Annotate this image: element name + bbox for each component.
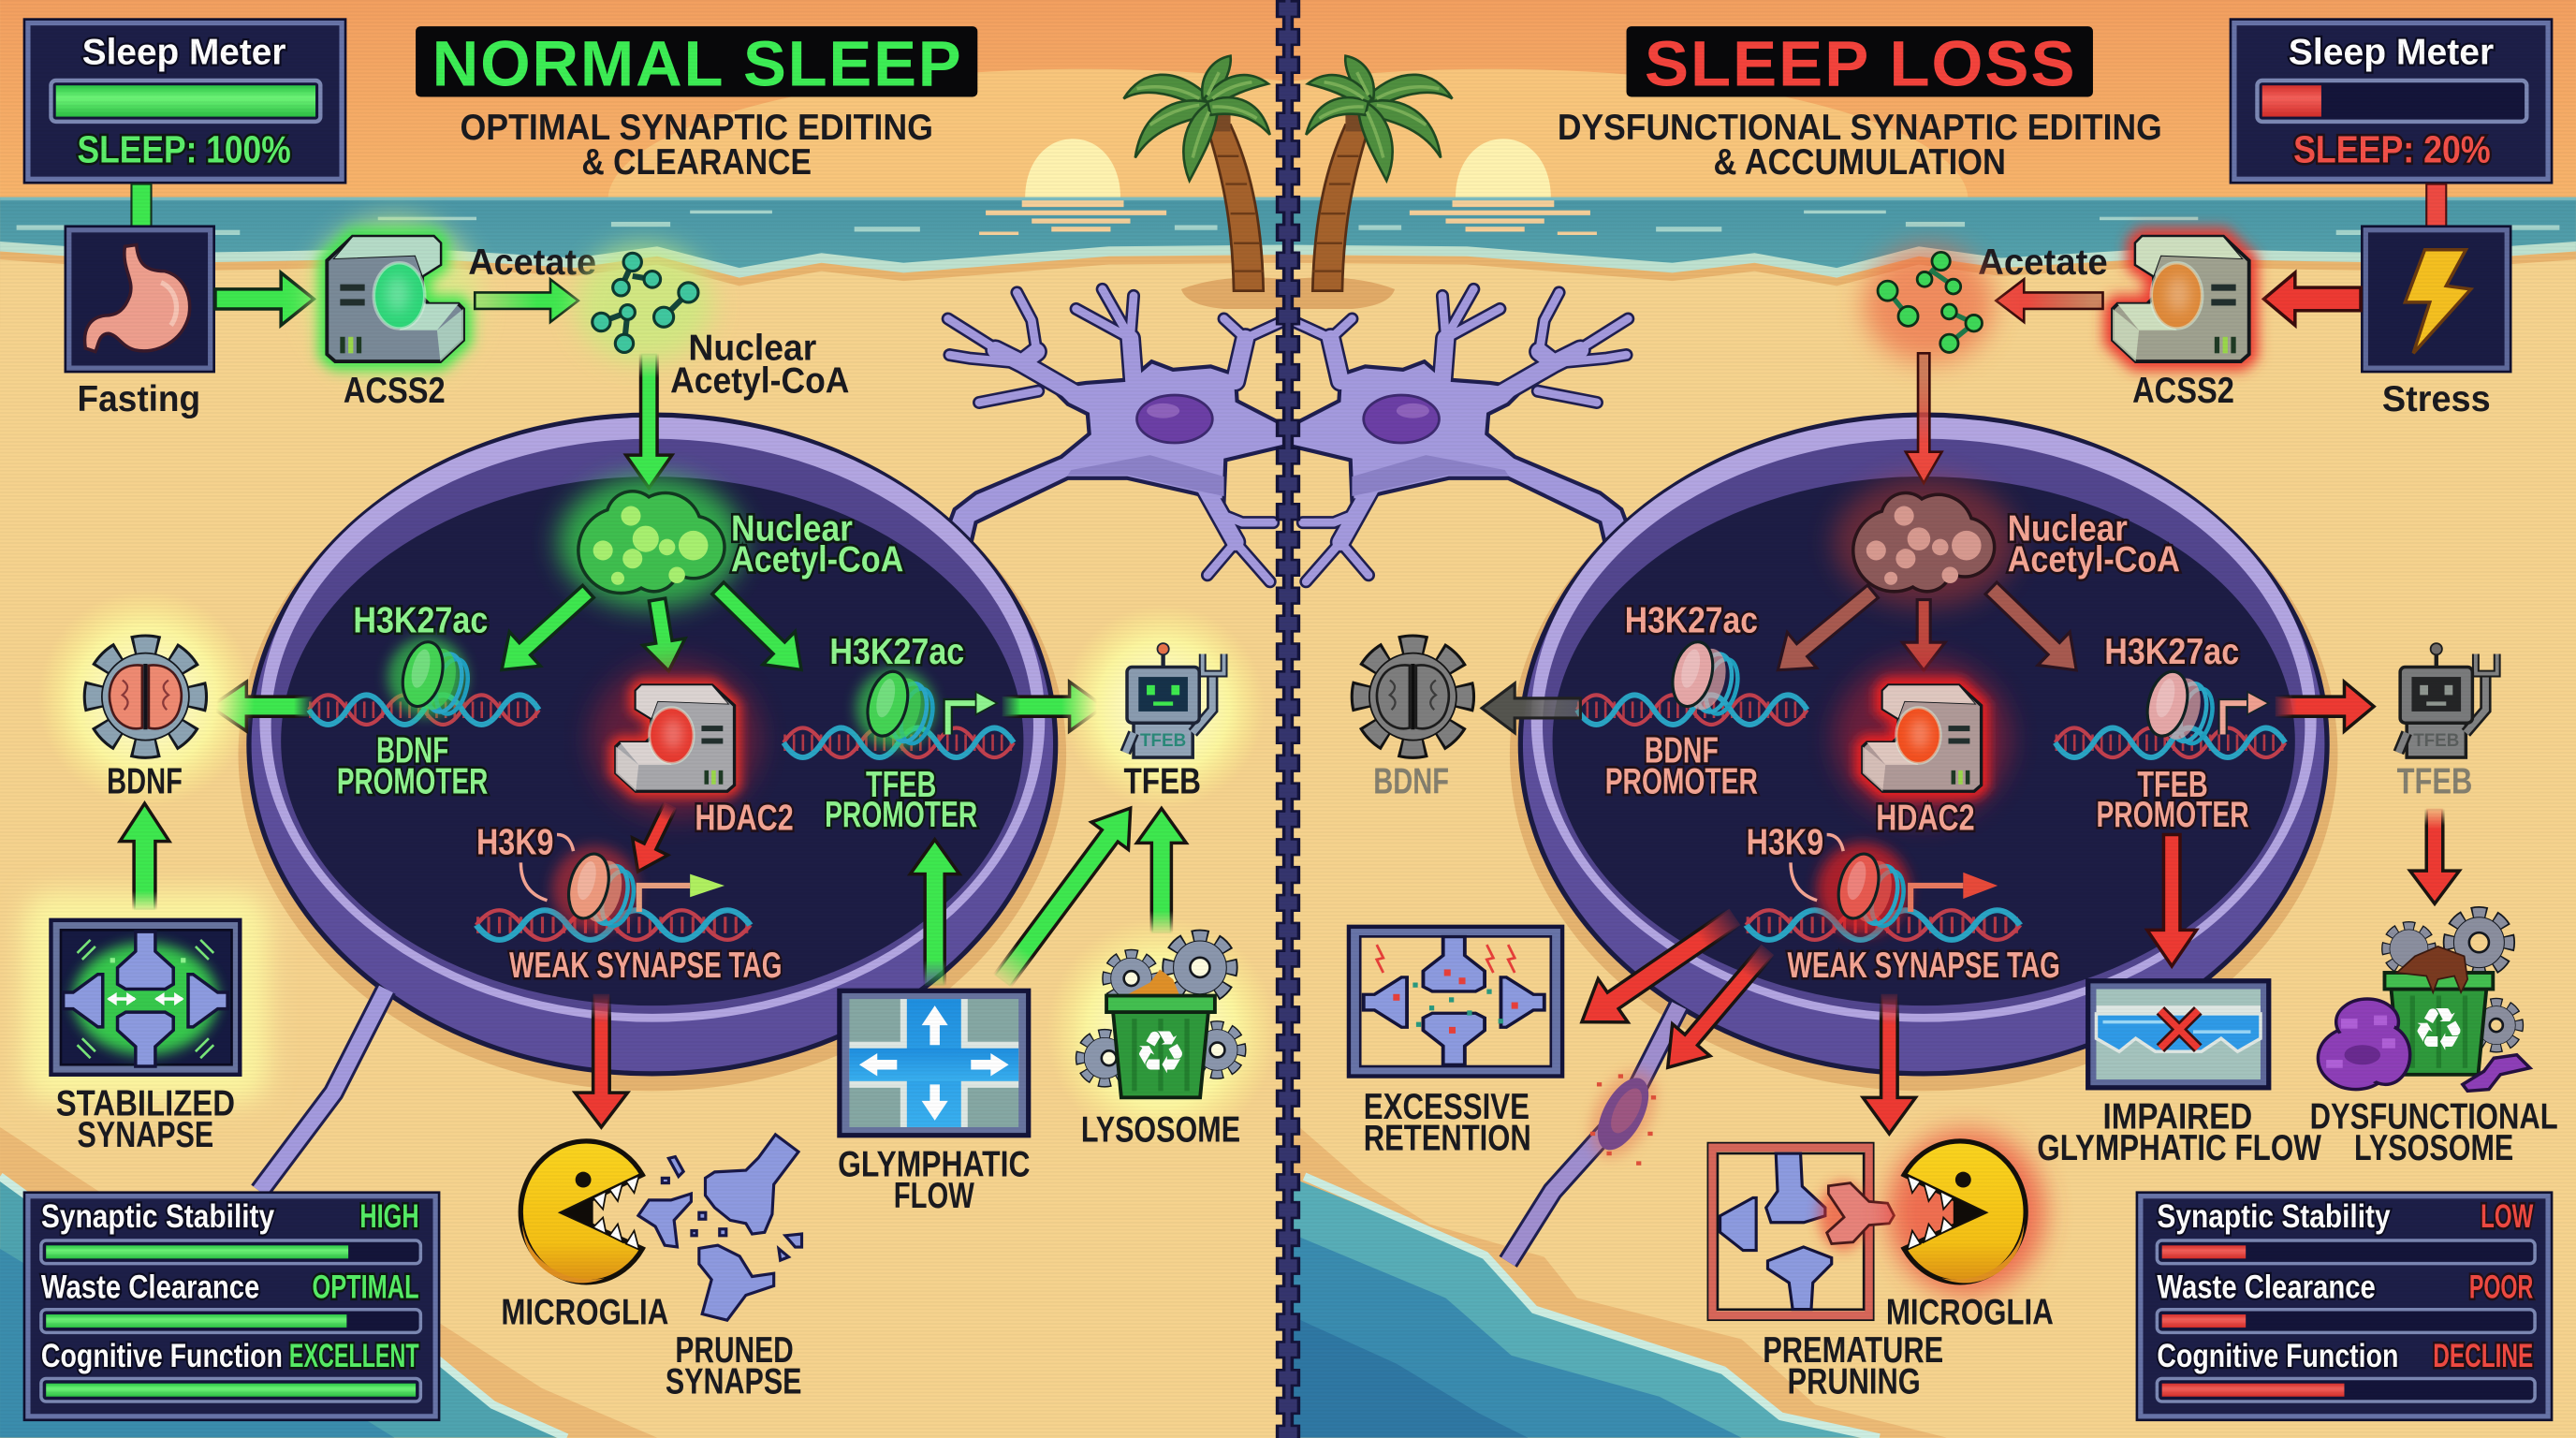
arrow: h3k9 marks left — [520, 835, 574, 901]
label: nuclear acetyl-coa upper left — [670, 328, 849, 401]
panel: sleep meter right — [2230, 18, 2553, 184]
arrow: acetate to nucleus right — [1906, 353, 1942, 483]
center divider — [1284, 0, 1292, 1438]
row: synaptic stability right: LOW — [2481, 1198, 2534, 1235]
label: bdnf promoter right — [1605, 730, 1758, 802]
label: bdnf promoter left — [337, 730, 488, 802]
subtitle right — [1558, 108, 2162, 183]
row: cognitive function: EXCELLENT — [289, 1338, 419, 1374]
arrow: acetate to nucleus left — [626, 353, 672, 488]
row: synaptic stability right — [2157, 1198, 2535, 1264]
sleep value: SLEEP: 100% — [78, 128, 291, 171]
label: weak synapse tag right: WEAK SYNAPSE TAG — [1788, 946, 2060, 986]
subtitle right: DYSFUNCTIONAL SYNAPTIC EDITING — [1558, 108, 2162, 148]
arrow: tag to axon damage — [1649, 933, 1787, 1083]
icon: acetyl-coa cluster right — [1834, 477, 2017, 608]
dna: weak synapse left — [476, 910, 750, 940]
row: waste clearance right: POOR — [2469, 1269, 2533, 1305]
sleep meter bar — [2257, 81, 2526, 122]
label: h3k9 left: H3K9 — [476, 823, 554, 863]
icon: microglia left — [520, 1141, 642, 1283]
label: microglia right: MICROGLIA — [1886, 1293, 2054, 1333]
label: glymphatic flow: GLYMPHATIC — [838, 1145, 1030, 1185]
title: normal sleep: NORMAL SLEEP — [432, 27, 963, 99]
label: bdnf promoter right: PROMOTER — [1605, 762, 1758, 802]
icon: nucleosome bdnf left — [388, 638, 476, 717]
axon right with damage — [1508, 1005, 1679, 1262]
panel: status right — [2136, 1191, 2553, 1421]
label: h3k27ac bdnf right: H3K27ac — [1625, 601, 1758, 641]
connector meter to stress — [2426, 184, 2446, 227]
arrow: acss2 to acetate — [475, 279, 578, 322]
arrow: transcription tfeb right — [2223, 692, 2269, 734]
label: glymphatic flow — [838, 1145, 1030, 1216]
icon: ACSS2 left — [309, 217, 480, 381]
sleep meter title: Sleep Meter — [82, 32, 285, 72]
label: ACSS2 right: ACSS2 — [2132, 371, 2234, 411]
subtitle right: & ACCUMULATION — [1714, 142, 2006, 183]
icon: stress bolt — [2361, 225, 2511, 373]
label: tfeb promoter left: TFEB — [866, 765, 936, 805]
label: pruned synapse: PRUNED — [675, 1330, 794, 1371]
arrow: stress to acss2 — [2263, 272, 2361, 325]
icon: acetyl-coa cluster left — [559, 477, 742, 608]
icon: microglia right — [1888, 1130, 2045, 1295]
row: cognitive function right — [2157, 1338, 2535, 1401]
arrow: cluster to HDAC2 — [637, 596, 690, 674]
label: h3k27ac tfeb right: H3K27ac — [2104, 632, 2239, 672]
label: h3k27ac bdnf left: H3K27ac — [353, 601, 488, 641]
icon: BDNF brain gear right greyed — [1364, 647, 1462, 746]
label: pruned synapse — [666, 1330, 802, 1401]
arrow: cluster to HDAC2 right — [1902, 600, 1945, 670]
row: waste clearance right: Waste Clearance — [2157, 1269, 2376, 1305]
label: nuclear acetyl-coa inner left: Nuclear — [731, 508, 853, 549]
subtitle left: OPTIMAL SYNAPTIC EDITING — [460, 108, 933, 148]
icon: nucleosome h3k9 left — [552, 846, 641, 932]
arrow: lysosome to TFEB — [1137, 808, 1186, 933]
label: tfeb promoter right: TFEB — [2137, 765, 2208, 805]
dna: bdnf promoter right — [1577, 695, 1808, 725]
dna: weak synapse right — [1747, 910, 2020, 940]
arrow: tag to premature pruning — [1863, 994, 1915, 1134]
arrow: cluster to BDNF promoter — [487, 575, 604, 687]
axon left — [259, 990, 386, 1191]
subtitle left — [460, 108, 933, 183]
icon: acetate molecules left — [575, 244, 713, 363]
label: glymphatic flow: FLOW — [894, 1176, 974, 1216]
label: nuclear acetyl-coa inner right — [2008, 508, 2180, 580]
row: cognitive function right: DECLINE — [2433, 1338, 2533, 1374]
label: bdnf right: BDNF — [1373, 762, 1449, 802]
icon: acetate molecules right — [1863, 244, 1995, 363]
arrow: weak transcription left — [639, 874, 724, 912]
dna: tfeb promoter right — [2056, 727, 2285, 757]
background: beach scene left — [0, 0, 1560, 1438]
label: weak synapse tag left: WEAK SYNAPSE TAG — [509, 946, 782, 986]
label: excessive retention — [1364, 1087, 1531, 1159]
row: waste clearance — [41, 1269, 420, 1332]
label: excessive retention: EXCESSIVE — [1364, 1087, 1530, 1127]
label: nuclear acetyl-coa inner right: Acetyl-CoA — [2008, 540, 2180, 580]
nucleus right — [1510, 413, 2337, 1091]
nucleus left — [239, 413, 1066, 1091]
arrow: promoter to TFEB — [1003, 682, 1104, 731]
arrow: cluster to BDNF promoter right — [1764, 574, 1887, 688]
arrow: cluster to TFEB promoter right — [1975, 572, 2092, 687]
sleep meter title: Sleep Meter — [2289, 32, 2494, 72]
label: nuclear acetyl-coa upper left: Nuclear — [688, 328, 816, 368]
icon: HDAC2 right — [1834, 657, 2011, 822]
arrow: hdac2 to weak synapse — [621, 797, 688, 880]
label: tfeb right: TFEB — [2397, 762, 2472, 802]
row: cognitive function right: Cognitive Function — [2157, 1338, 2398, 1374]
arrow: acss2 to acetate right — [1996, 279, 2102, 322]
label: tfeb promoter right — [2096, 765, 2249, 835]
icon: stabilized synapse — [23, 892, 268, 1103]
row: synaptic stability — [41, 1198, 420, 1264]
icon: stomach — [65, 225, 215, 373]
icon: impaired glymphatic flow — [2088, 981, 2269, 1088]
label: acetate right: Acetate — [1978, 242, 2108, 283]
sleep meter bar — [51, 81, 320, 122]
label: nuclear acetyl-coa inner right: Nuclear — [2008, 508, 2128, 549]
label: nuclear acetyl-coa inner left — [731, 508, 903, 580]
label: impaired glymphatic flow: GLYMPHATIC FLOW — [2037, 1128, 2321, 1168]
label: fasting: Fasting — [78, 379, 200, 419]
icon: nucleosome h3k9 right — [1817, 843, 1911, 935]
label: nuclear acetyl-coa upper left: Acetyl-CoA — [670, 360, 849, 401]
label: microglia left: MICROGLIA — [501, 1293, 668, 1333]
arrow: promoter to TFEB right — [2276, 682, 2374, 731]
label: stabilized synapse: STABILIZED — [56, 1084, 235, 1124]
label: stress: Stress — [2382, 379, 2491, 419]
label: premature pruning: PRUNING — [1788, 1361, 1921, 1401]
label: bdnf promoter right: BDNF — [1645, 730, 1719, 770]
label: tfeb left: TFEB — [1123, 762, 1201, 802]
icon: BDNF brain gear left — [37, 590, 255, 807]
icon: nucleosome tfeb left — [856, 668, 941, 748]
dna: tfeb promoter left — [783, 727, 1014, 757]
label: h3k9 right: H3K9 — [1747, 823, 1823, 863]
arrow: tfeb promoter to impaired flow — [2147, 835, 2197, 966]
icon: nucleosome tfeb right — [2141, 668, 2220, 747]
label: excessive retention: RETENTION — [1364, 1119, 1531, 1159]
title: sleep loss: SLEEP LOSS — [1645, 27, 2076, 99]
label: stabilized synapse: SYNAPSE — [78, 1115, 213, 1155]
row: cognitive function: Cognitive Function — [41, 1338, 283, 1374]
label: ACSS2 left: ACSS2 — [344, 371, 446, 411]
icon: nucleosome bdnf right — [1666, 638, 1745, 717]
label: tfeb promoter left — [825, 765, 977, 835]
label: stabilized synapse — [56, 1084, 235, 1155]
background: beach scene right — [1016, 0, 2576, 1438]
label: bdnf promoter left: PROMOTER — [337, 762, 488, 802]
icon: ACSS2 right — [2113, 237, 2249, 361]
label: dysfunctional lysosome — [2310, 1097, 2558, 1168]
icon: premature pruning — [1708, 1143, 1894, 1319]
arrow: glymphatic to TFEB promoter — [910, 840, 959, 986]
label: lysosome left: LYSOSOME — [1081, 1110, 1240, 1151]
label: hdac2 left: HDAC2 — [695, 798, 794, 838]
row: synaptic stability: Synaptic Stability — [41, 1198, 275, 1235]
icon: glymphatic flow — [840, 990, 1029, 1136]
label: tfeb promoter left: PROMOTER — [825, 795, 977, 835]
label: impaired glymphatic flow — [2037, 1097, 2321, 1168]
arrow: glymphatic to TFEB — [984, 795, 1149, 994]
arrow: tag to microglia — [575, 994, 627, 1127]
label: impaired glymphatic flow: IMPAIRED — [2102, 1097, 2252, 1137]
label: premature pruning — [1763, 1330, 1943, 1401]
row: cognitive function — [41, 1338, 420, 1401]
row: synaptic stability right: Synaptic Stability — [2157, 1198, 2391, 1235]
label: premature pruning: PREMATURE — [1763, 1330, 1943, 1371]
label: tfeb promoter right: PROMOTER — [2096, 795, 2249, 835]
icon: excessive retention — [1349, 927, 1562, 1077]
arrow: fasting to acss2 — [215, 272, 314, 325]
icon: HDAC2 left — [590, 661, 761, 818]
row: waste clearance: Waste Clearance — [41, 1269, 259, 1305]
arrow: tfeb to lysosome right — [2410, 808, 2459, 903]
icon: robot TFEB left — [1061, 605, 1265, 808]
subtitle left: & CLEARANCE — [581, 142, 812, 183]
label: pruned synapse: SYNAPSE — [666, 1361, 802, 1401]
background: right corner shore — [1288, 1117, 1947, 1438]
arrow: cluster to TFEB promoter — [702, 572, 817, 686]
arrow: synapse to BDNF — [120, 803, 169, 910]
label: acetate left: Acetate — [468, 242, 596, 283]
icon: pruned synapse fragments — [638, 1135, 802, 1320]
panel: sleep meter left — [23, 18, 346, 184]
icon: robot TFEB right greyed — [2398, 643, 2497, 757]
panel: status left — [23, 1191, 440, 1421]
icon: lysosome bin — [1046, 917, 1277, 1147]
arrow: promoter to BDNF right — [1482, 683, 1580, 733]
dna: bdnf promoter left — [309, 695, 539, 725]
arrow: weak transcription right — [1910, 873, 1998, 912]
row: waste clearance right — [2157, 1269, 2535, 1332]
label: hdac2 right: HDAC2 — [1876, 798, 1975, 838]
label: h3k27ac tfeb left: H3K27ac — [829, 632, 964, 672]
row: waste clearance: OPTIMAL — [313, 1269, 419, 1305]
row: synaptic stability: HIGH — [359, 1198, 419, 1235]
arrow: transcription tfeb left — [948, 692, 997, 734]
background: left corner shore — [0, 1127, 657, 1438]
arrow: tag to excessive retention — [1567, 895, 1749, 1044]
arrow: promoter to BDNF — [211, 682, 313, 731]
label: nuclear acetyl-coa inner left: Acetyl-CoA — [731, 540, 903, 580]
connector meter to fasting — [131, 184, 152, 227]
sleep value: SLEEP: 20% — [2293, 128, 2491, 171]
icon: dysfunctional lysosome — [2318, 914, 2530, 1091]
label: bdnf promoter left: BDNF — [376, 730, 448, 770]
label: bdnf left: BDNF — [107, 762, 183, 802]
arrow: h3k9 marks right — [1791, 835, 1843, 901]
label: dysfunctional lysosome: LYSOSOME — [2354, 1128, 2513, 1168]
